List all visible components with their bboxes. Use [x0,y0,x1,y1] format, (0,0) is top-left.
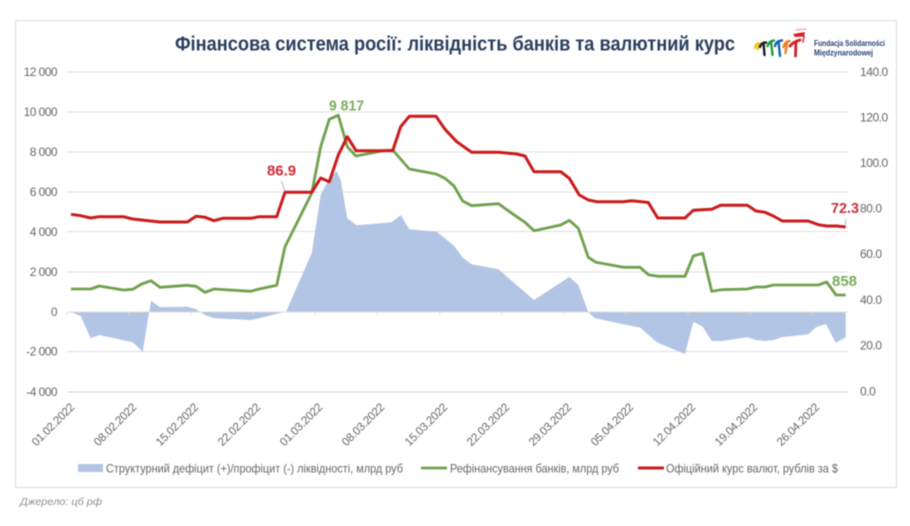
logo: Fundacja Solidarności Międzynarodowej [755,29,885,58]
gridlines [67,72,848,392]
x axis date labels [30,402,822,449]
x axis date labels: 08.02.2022 [92,402,139,449]
left axis labels: -4 000 [26,385,58,399]
x axis date labels: 15.03.2022 [403,402,450,449]
x axis date labels: 01.02.2022 [30,402,77,449]
title: Фінансова система росії: ліквідність банків та валютний курс [175,34,735,56]
x axis date labels: 05.04.2022 [589,402,636,449]
x axis date labels: 12.04.2022 [651,402,698,449]
left axis labels: 10 000 [24,105,58,119]
x axis date labels: 29.03.2022 [527,402,574,449]
x axis date labels: 01.03.2022 [278,402,325,449]
logo icon: coloured figures with flag [755,29,806,56]
left axis labels: 0 [51,305,58,319]
x axis date labels: 22.02.2022 [216,402,263,449]
x axis date labels: 26.04.2022 [775,402,822,449]
line series: official exchange rate [71,116,846,227]
right axis labels: 80.0 [860,202,882,216]
left axis labels: 4 000 [30,225,58,239]
left axis labels: 2 000 [30,265,58,279]
logo text: Fundacja Solidarności [814,38,885,48]
x axis date labels: 19.04.2022 [713,402,760,449]
right axis labels: 40.0 [860,293,882,307]
right axis labels: 60.0 [860,247,882,261]
legend item: exchange rate line: Офіційний курс валют, рублів за $ [666,462,838,476]
data label: exchange rate 72.3 with leader [831,200,859,226]
right axis labels [860,65,889,398]
left axis labels: 6 000 [30,185,58,199]
zero axis with ticks [67,312,848,315]
left axis labels: 12 000 [24,65,58,79]
data label: refinancing 858: 858 [832,273,857,290]
legend [78,462,838,476]
logo text: Międzynarodowej [814,48,873,58]
right axis labels: 20.0 [860,338,882,352]
right axis labels: 100.0 [860,156,889,170]
right axis labels: 140.0 [860,65,889,79]
data label: exchange rate 72.3 with leader: 72.3 [831,200,859,217]
data label: exchange rate 86.9 with leader [267,162,296,191]
legend item: refinancing line: Рефінансування банків, млрд руб [450,462,619,476]
left axis labels [24,65,58,399]
legend item: liquidity area: Структурний дефіцит (+)/профіцит (-) ліквідності, млрд руб [106,462,403,476]
right axis labels: 120.0 [860,110,889,124]
left axis labels: 8 000 [30,145,58,159]
x axis date labels: 15.02.2022 [154,402,201,449]
right axis labels: 0.0 [860,384,876,398]
left axis labels: -2 000 [26,344,58,358]
data label: peak refinancing 9 817: 9 817 [329,98,364,114]
source note: Джерело: цб рф [19,496,102,508]
logo text [814,38,885,58]
line series: bank refinancing [71,115,846,295]
x axis date labels: 22.03.2022 [465,402,512,449]
x axis date labels: 08.03.2022 [340,402,387,449]
area series: structural liquidity deficit/surplus [71,171,846,354]
data label: exchange rate 86.9 with leader: 86.9 [267,162,296,180]
